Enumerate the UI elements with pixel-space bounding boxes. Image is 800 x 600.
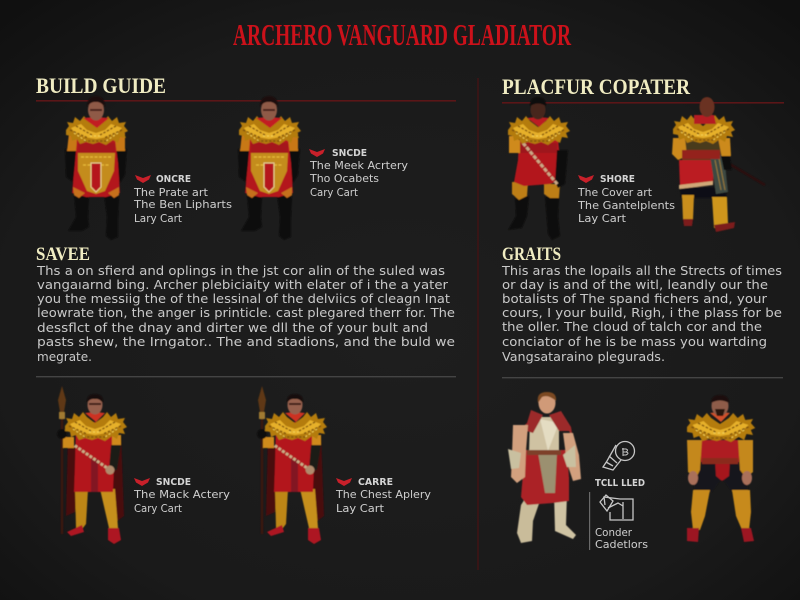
paragraph: the oller. The cloud of talch cor and the [502,319,762,334]
figure: gladiator back view [672,97,765,232]
paragraph [501,263,782,364]
callout: shore: The Cover art [577,187,652,199]
callout: sncde lower: Cary Cart [134,503,182,515]
figure: pale armoured gladiator [508,392,581,543]
callout: oncre: The Ben Lipharts [133,199,232,211]
heading: build guide: BUILD GUIDE [36,73,166,98]
paragraph: or day is and of the witl, leandly our the [502,277,768,292]
label: conder cadetlors: Cadetlors [595,539,648,551]
callout: carre [335,477,431,515]
callout: oncre: The Prate art [133,187,208,199]
callout: sncde lower: SNCDE [156,477,191,488]
icon: card with hand [600,495,633,520]
callout: sncde: The Meek Acrtery [309,160,408,172]
panel: build guide [36,73,456,240]
figure: gladiator one [65,96,128,240]
paragraph: This aras the lopails all the Strects of times [501,263,782,278]
callout: shore: The Gantelplents [577,200,675,212]
panel: lower right builds [508,392,755,551]
heading: graits: GRAITS [502,244,561,265]
panel: savee text block [36,244,456,377]
paragraph: dessflct of the dnay and dirter we dll the of your bult and [37,320,428,335]
callout: sncde lower: The Mack Actery [133,489,230,501]
label: tcll lled: TCLL LLED [595,478,645,489]
paragraph: cours, I your build, Righ, i the plass for be [502,305,782,320]
title: ARCHERO VANGUARD GLADIATOR [233,17,571,52]
callout: sncde [309,148,408,199]
paragraph: you the messiig the of the lessinal of the delviics of cleagn Inat [37,291,450,306]
paragraph: megrate. [37,349,92,364]
paragraph: botalists of The spand fichers and, your [502,291,768,306]
paragraph: conciator of he is be mass you wartding [502,334,767,349]
heading: placfur copater: PLACFUR COPATER [502,74,691,99]
callout: oncre: Lary Cart [134,213,182,225]
heading: savee: SAVEE [36,244,90,265]
callout: sncde lower [133,477,230,515]
section rule [502,377,783,378]
paragraph: leowrate tion, the anger is printicle. cast plegared therr for. The [37,305,455,320]
paragraph: Ths a on sfierd and oplings in the jst cor alin of the suled was [36,263,445,278]
callout: carre: The Chest Aplery [335,489,431,501]
panel: graits text block [501,244,783,378]
icon: coin and drill [603,442,634,470]
paragraph [36,263,455,364]
heading rule [36,100,456,102]
section rule [36,376,456,377]
panel: placfur copater [502,74,784,240]
paragraph: Vangsataraino plegurads. [502,349,665,364]
heading rule [502,102,784,104]
callout: carre: Lay Cart [336,503,384,515]
paragraph: vangaıarnd bing. Archer plebiciaity with elater of i the a yater [37,277,449,292]
callout: sncde: Tho Ocabets [309,173,379,185]
paragraph: pasts shew, the Irngator.. The and stadions, and the buld we [37,334,455,349]
label: conder cadetlors [595,527,648,551]
figure: gladiator with staff one [57,386,127,544]
callout: oncre: ONCRE [156,174,191,185]
callout: carre: CARRE [358,477,393,488]
figure: gladiator with staff two [257,386,327,544]
figure: gladiator two [238,96,301,240]
callout: shore: Lay Cart [578,213,626,225]
callout: oncre [133,174,232,225]
label: conder cadetlors: Conder [595,527,633,539]
figure: dark gladiator with sword [508,97,570,240]
callout: shore [577,174,675,225]
figure: gold armoured gladiator [687,395,755,542]
vertical rule [589,492,590,550]
panel: lower left builds [57,386,431,544]
panel divider [477,78,479,570]
callout: shore: SHORE [600,174,635,185]
callout: sncde: Cary Cart [310,187,358,199]
callout: sncde: SNCDE [332,148,367,159]
